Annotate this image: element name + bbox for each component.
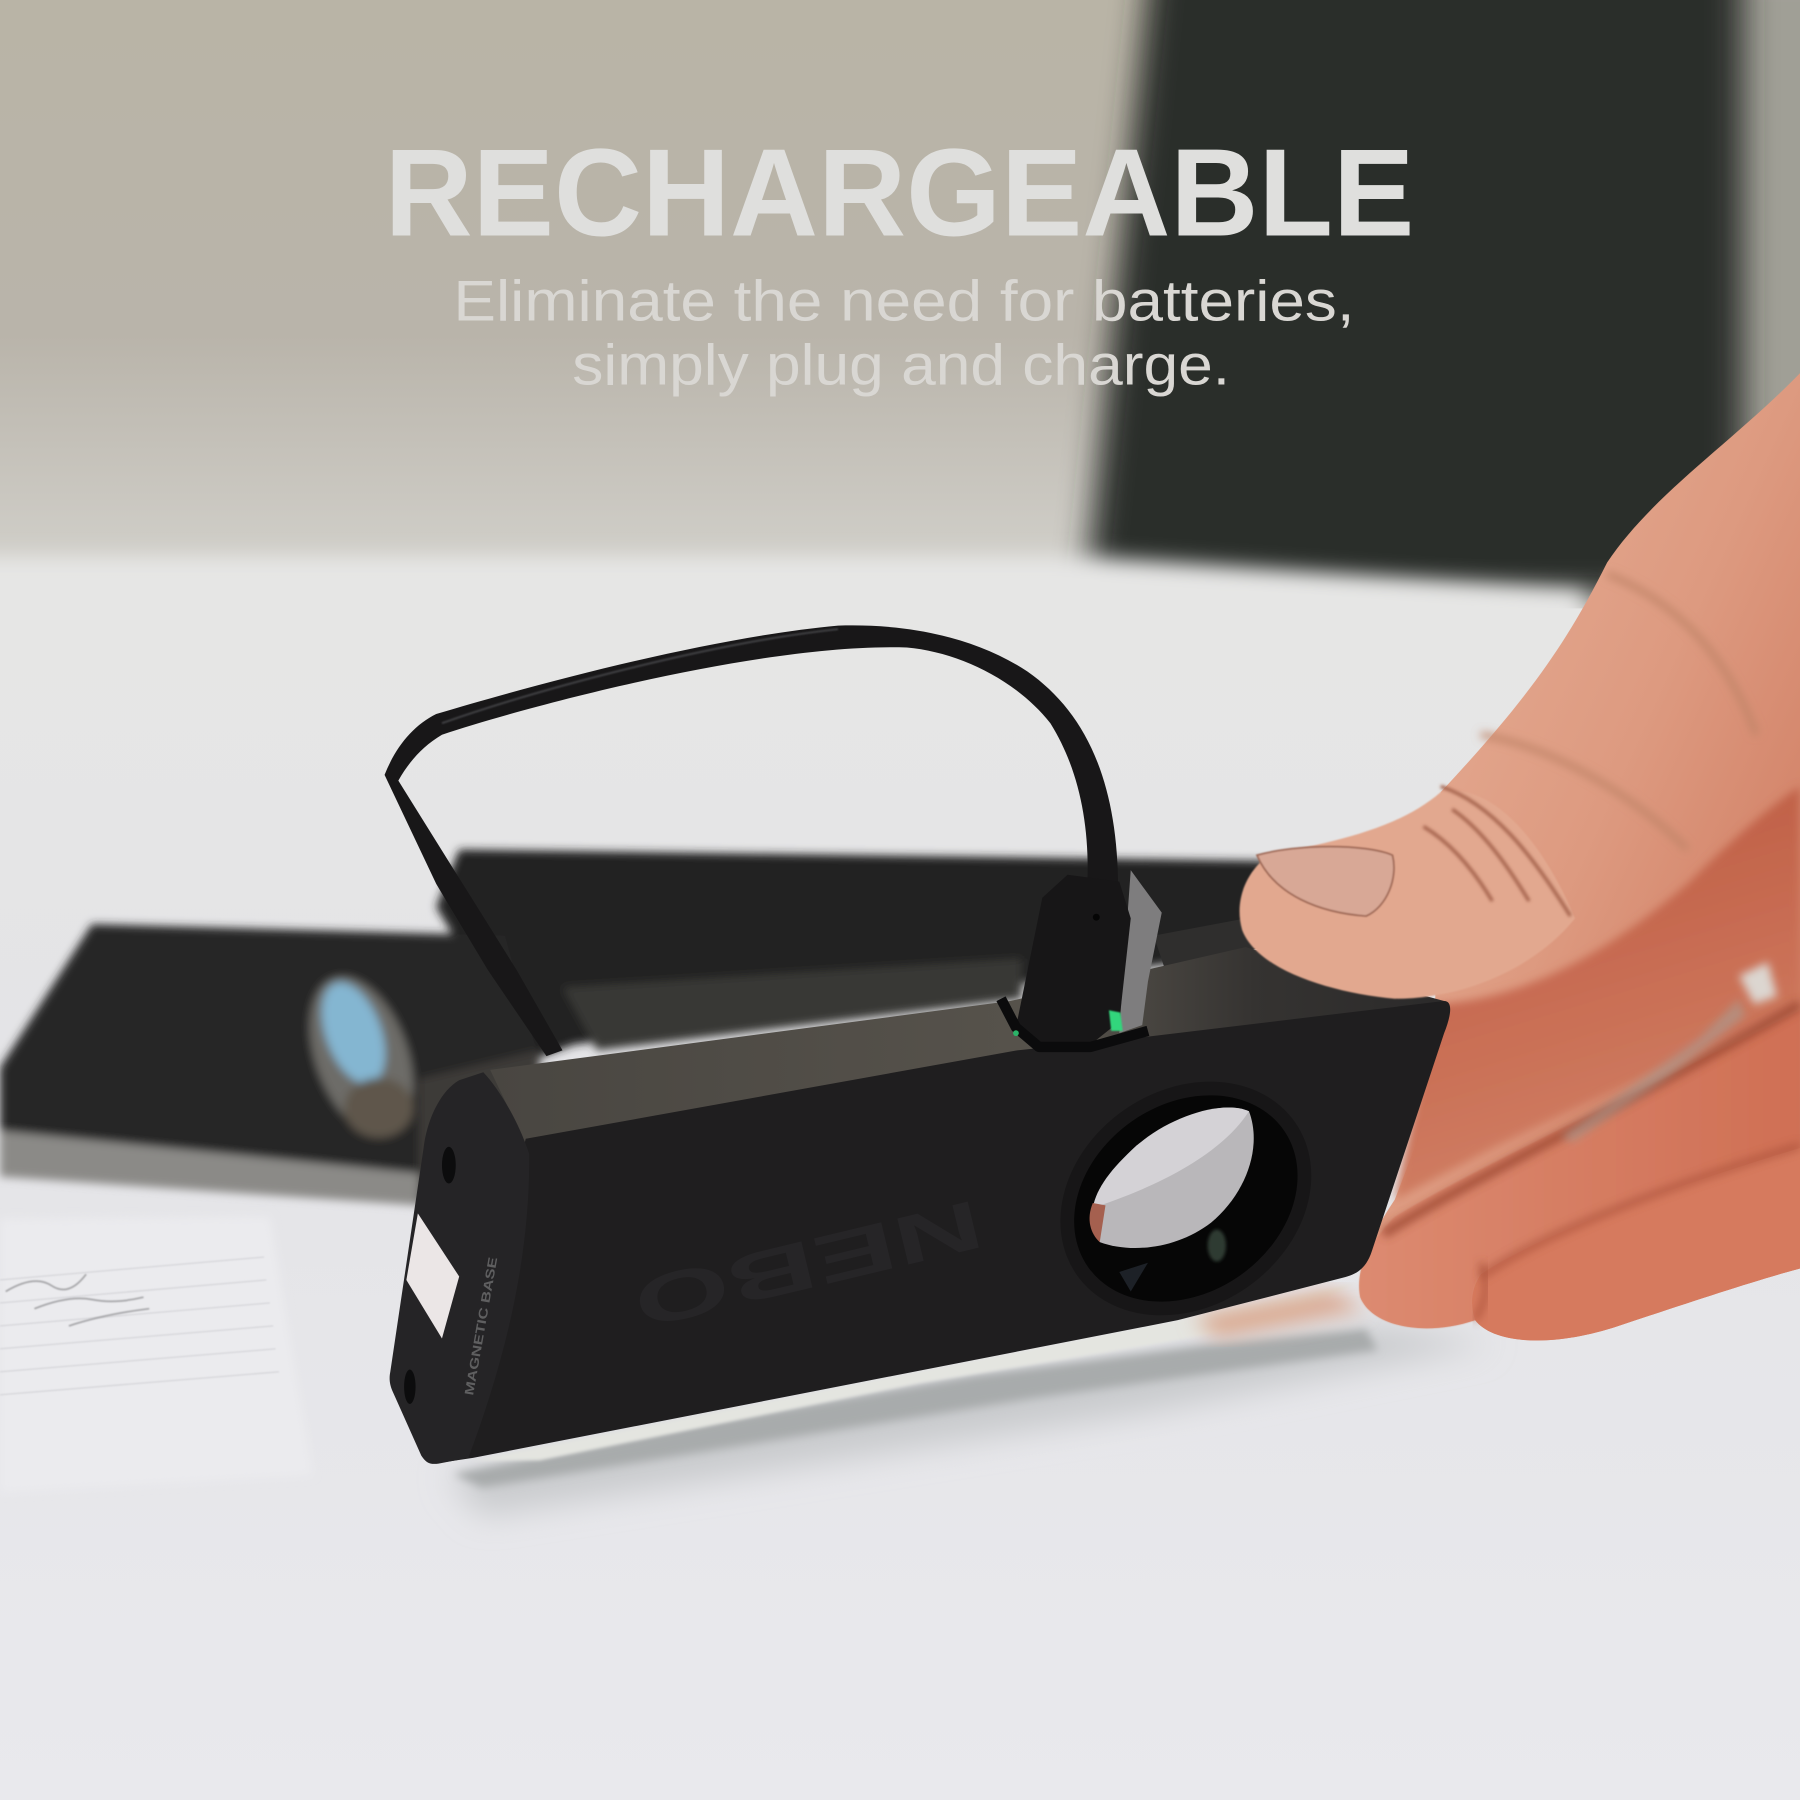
- hand: [1359, 373, 1800, 1341]
- finger gap highlight: [1561, 999, 1745, 1142]
- lens ring: [1015, 1034, 1357, 1363]
- background wall: [0, 0, 1800, 608]
- notebook: [0, 849, 1274, 1205]
- end lens: [406, 1213, 459, 1339]
- dark panel: [1085, 0, 1743, 597]
- USB cable: [385, 625, 1118, 1056]
- subtitle: simply plug and charge.: [572, 334, 1230, 398]
- top face: [490, 947, 1444, 1154]
- thumbnail: [1257, 847, 1394, 916]
- palm shadow: [1395, 786, 1800, 1200]
- magnetic base text: MAGNETIC BASE: [462, 1256, 500, 1396]
- end cap: [390, 1072, 529, 1464]
- device shadow: [448, 1283, 1492, 1515]
- logo: NEBO: [626, 1185, 990, 1343]
- screw holes: [442, 1147, 456, 1184]
- title: RECHARGEABLE: [385, 124, 1414, 262]
- charging plug: [1001, 870, 1162, 1047]
- green LED: [1109, 1010, 1123, 1031]
- device: [390, 918, 1450, 1464]
- index finger: [1359, 1010, 1800, 1328]
- paper sheet: [0, 1217, 312, 1492]
- little finger: [1472, 1148, 1800, 1341]
- subtitle: Eliminate the need for batteries,: [453, 269, 1355, 333]
- knuckle creases: [1481, 574, 1756, 849]
- table surface: [0, 557, 1800, 1800]
- main face: [442, 1001, 1450, 1462]
- slider bumps: [1154, 918, 1263, 970]
- lens reflector: [1093, 1108, 1254, 1248]
- subtitle: [453, 269, 1355, 398]
- thumb: [1240, 786, 1575, 999]
